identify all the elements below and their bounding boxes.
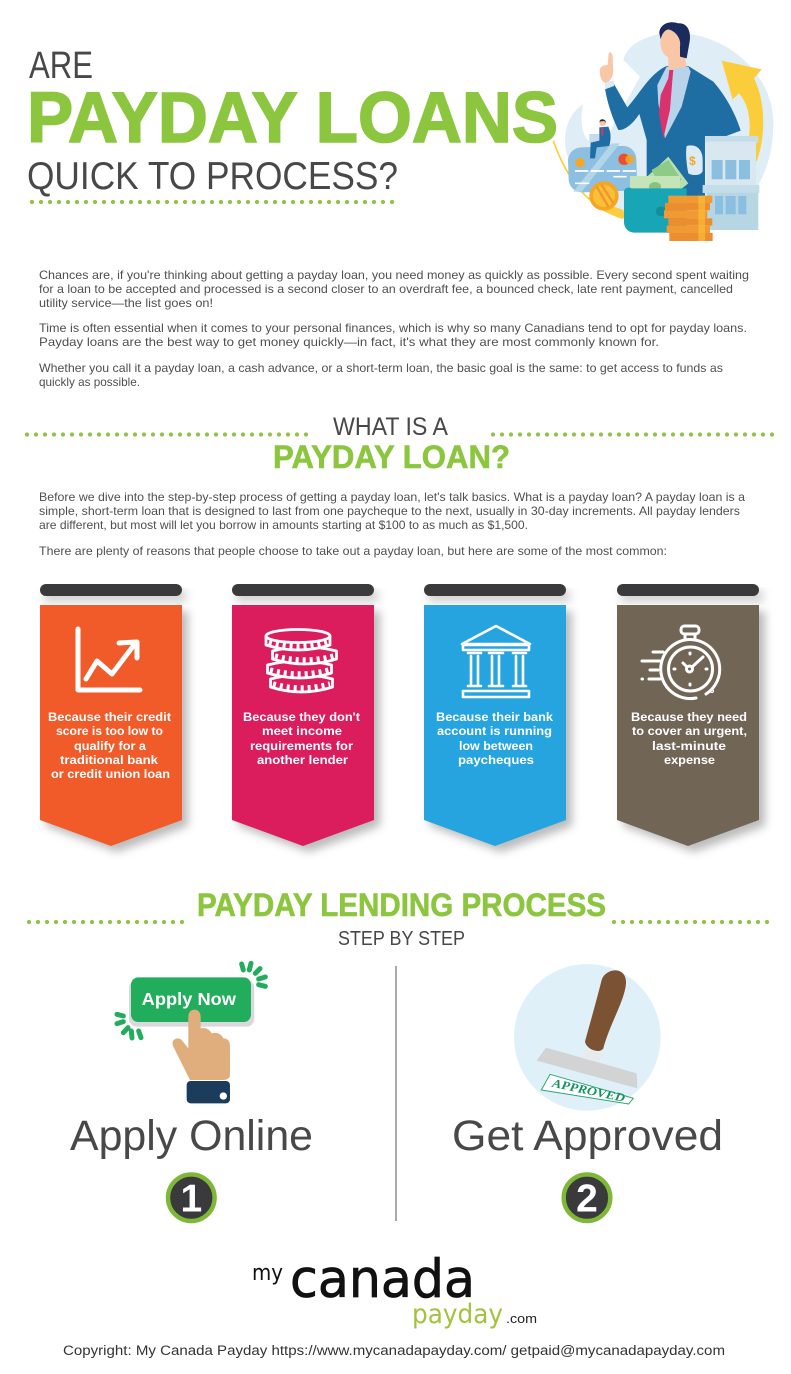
panel: credit score banner: traditional bank (60, 753, 158, 767)
intro text: Time is often essential when it comes to your personal finances, which is why so many Canadians tend to opt for payday loans. (39, 322, 747, 335)
icon: rising chart (78, 629, 140, 690)
divider between steps (396, 966, 397, 1221)
panel: credit score banner: or credit union loan (51, 767, 170, 781)
panel: urgent expense banner: last-minute (652, 739, 726, 753)
title (27, 45, 558, 202)
illustration: businessman with money and bank (553, 22, 773, 241)
panel: urgent expense banner: to cover an urgent, (632, 724, 747, 738)
title: QUICK TO PROCESS? (27, 155, 398, 198)
panel: income banner: another lender (257, 753, 348, 767)
intro text: quickly as possible. (39, 376, 140, 389)
step 2: get approved: Get Approved (452, 1112, 723, 1160)
heading: what is a payday loan: PAYDAY LOAN? (273, 439, 510, 475)
panel: urgent expense banner: Because they need (631, 710, 747, 724)
logo: .com (506, 1311, 537, 1326)
definition text: Before we dive into the step-by-step process of getting a payday loan, let's talk basics. What is a payday loan? A payday loan is a (39, 491, 746, 504)
definition text: There are plenty of reasons that people choose to take out a payday loan, but here are some of the most common: (39, 545, 667, 558)
copyright: Copyright: My Canada Payday https://www.mycanadapayday.com/ getpaid@mycanadapayday.com (63, 1343, 725, 1358)
icon: apply now button and hand (117, 963, 265, 1103)
panel: income banner: meet income (262, 724, 342, 738)
icon: bank building (462, 626, 530, 697)
badge: number 2 (564, 1174, 610, 1221)
panel: credit score banner: Because their credit (48, 710, 171, 724)
heading: payday lending process (29, 887, 770, 950)
icon: stopwatch (642, 626, 720, 699)
logo: canada (290, 1249, 475, 1310)
intro text: Payday loans are the best way to get money quickly—in fact, it's what they are most commonly known for. (39, 336, 659, 349)
panel: bank account banner: paycheques (458, 753, 534, 767)
panel: credit score banner: qualify for a (74, 739, 146, 753)
panel: income banner: Because they don't (243, 710, 360, 724)
logo (252, 1249, 537, 1330)
panel: bank account banner: Because their bank (436, 710, 553, 724)
step 1: apply online (70, 963, 313, 1221)
badge: number 1: 1 (180, 1178, 202, 1220)
intro text: for a loan to be accepted and processed is a second closer to an overdraft fee, a bounced check, late rent payment, cancelled (39, 283, 733, 296)
icon: approved stamp (514, 964, 661, 1111)
panel: urgent expense banner (617, 584, 765, 852)
panel: bank account banner: low between (459, 739, 533, 753)
step 1: apply online: Apply Online (70, 1112, 313, 1160)
title: ARE (29, 45, 93, 87)
panel: bank account banner (424, 584, 572, 852)
illustration: businessman with money and bank: $ (689, 154, 696, 168)
step 2: get approved (452, 964, 723, 1221)
icon: apply now button and hand: Apply Now (142, 989, 237, 1009)
title: PAYDAY LOANS (27, 79, 558, 158)
intro text: Chances are, if you're thinking about getting a payday loan, you need money as quickly as possible. Every second spent waiting (39, 269, 749, 282)
definition text (39, 491, 746, 558)
badge: number 1 (168, 1174, 215, 1221)
panel: urgent expense banner: expense (664, 753, 715, 767)
icon: approved stamp: APPROVED (550, 1076, 627, 1105)
intro text: utility service—the list goes on! (39, 297, 213, 310)
panel: credit score banner (40, 584, 188, 852)
definition text: simple, short-term loan that is designed to last from one paycheque to the next, usually in 30-day increments. All payday lenders (39, 505, 740, 518)
panel: bank account banner: account is running (437, 724, 552, 738)
definition text: are different, but most will let you borrow in amounts starting at $100 to as much as $1,500. (39, 519, 528, 532)
heading: what is a payday loan (27, 413, 775, 475)
panel: income banner: requirements for (250, 739, 353, 753)
badge: number 2: 2 (576, 1178, 598, 1220)
panel: income banner (232, 584, 380, 852)
intro text: Whether you call it a payday loan, a cash advance, or a short-term loan, the basic goal is the same: to get access to funds as (39, 362, 723, 375)
logo: my (252, 1261, 283, 1286)
intro text (39, 269, 749, 389)
logo: payday (412, 1299, 503, 1330)
heading: payday lending process: PAYDAY LENDING PROCESS (197, 887, 606, 923)
heading: payday lending process: STEP BY STEP (338, 928, 465, 950)
icon: coin stack (266, 630, 336, 692)
heading: what is a payday loan: WHAT IS A (333, 413, 448, 441)
panel: credit score banner: score is too low to (56, 724, 163, 738)
